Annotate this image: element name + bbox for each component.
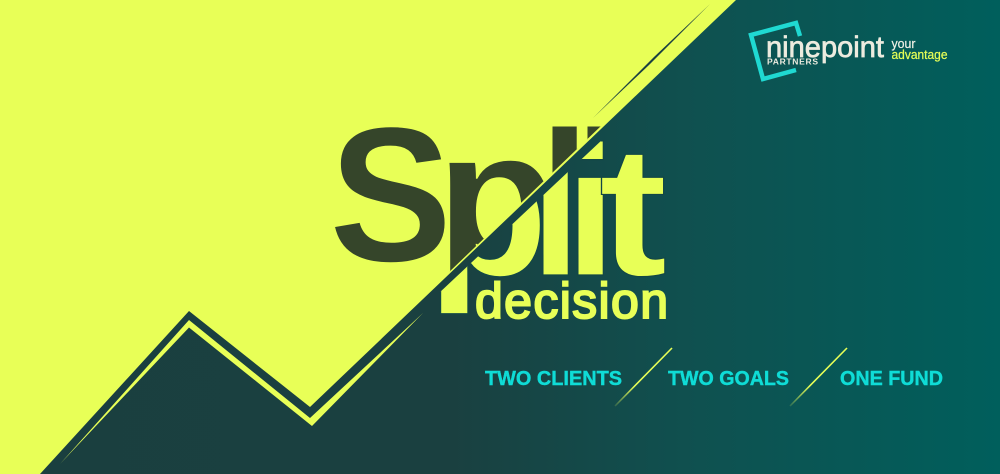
tagline: advantage: advantage [892,48,948,62]
title: Split decision [334,126,666,320]
slash divider two [790,348,847,406]
title: lower half of Split: p [427,106,549,315]
logo: ninepoint partners [751,23,948,79]
title: upper half of Split [334,126,601,272]
title: upper half of Split: p [436,93,558,299]
title: lower half of Split [440,141,664,314]
text: two goals: TWO GOALS [668,368,789,390]
title: lower half of Split: i [565,109,616,315]
yellow chart line inside dark shape [60,313,423,464]
dark sliver on the yellow field [593,4,710,118]
logo sub-mark: PARTNERS [767,56,818,66]
title: upper half of Split: S [329,87,452,302]
title: upper half of Split: t [608,93,676,300]
subtitle: decision: decision [475,273,668,329]
slash divider one [615,348,672,406]
title: upper half of Split: i [574,94,625,300]
title: upper half of Split: l [539,94,590,300]
text: two clients: TWO CLIENTS [485,368,622,390]
title: lower half of Split: l [530,109,581,315]
logo icon: open square bracket [751,23,800,79]
tagline: your: your [892,37,916,51]
text: one fund: ONE FUND [840,368,943,390]
title: lower half of Split: t [599,108,667,315]
logo wordmark: ninepoint [766,31,885,64]
tagline row [485,348,943,406]
